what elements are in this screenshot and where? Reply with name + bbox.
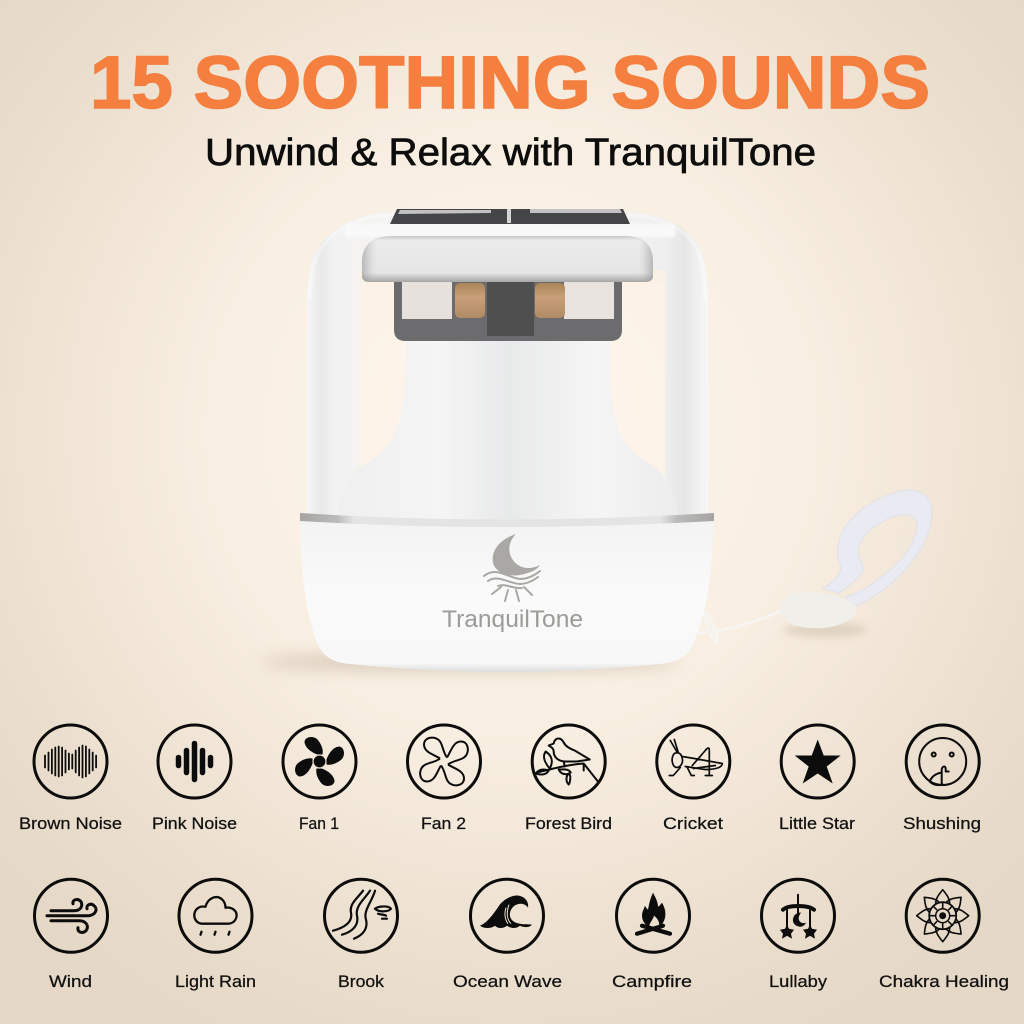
- icon: cloud with rain: [179, 879, 252, 952]
- label: Ocean Wave: [453, 972, 562, 991]
- sound: Fan 1: [283, 725, 356, 833]
- label: Campfire: [612, 972, 692, 991]
- sound: Forest Bird: [525, 725, 612, 833]
- label: Chakra Healing: [879, 972, 1009, 991]
- clear shell and handles: [307, 212, 708, 520]
- white base: [300, 521, 714, 672]
- top dark window: [390, 209, 630, 224]
- icon: solid fan: [283, 725, 356, 798]
- label: Pink Noise: [152, 814, 237, 833]
- neck and body: [338, 338, 678, 524]
- seam: [300, 513, 714, 528]
- sound: Brook: [324, 879, 398, 991]
- label: Wind: [49, 972, 92, 991]
- label: Cricket: [663, 814, 723, 833]
- label: Brown Noise: [19, 814, 122, 833]
- label: Fan 2: [421, 814, 466, 833]
- icon: cricket: [657, 725, 730, 798]
- icon: bird on branch: [532, 725, 605, 798]
- bead: [780, 592, 857, 628]
- sound: Chakra Healing: [879, 879, 1009, 991]
- sound grid: [19, 725, 1009, 991]
- floor shadow: [260, 653, 680, 671]
- product: TranquilTone speaker: [260, 209, 932, 672]
- label: Little Star: [779, 814, 855, 833]
- icon: wind: [34, 879, 108, 952]
- bead shadow: [783, 623, 867, 637]
- label: Light Rain: [175, 972, 256, 991]
- moon: [493, 534, 540, 576]
- label: Lullaby: [769, 972, 828, 991]
- sound: Lullaby: [762, 879, 834, 991]
- collar with drivers: [394, 270, 622, 341]
- icon: mandala: [906, 879, 979, 952]
- waves and rays: [484, 571, 540, 601]
- sound: Campfire: [612, 879, 692, 991]
- sound: Ocean Wave: [453, 879, 562, 991]
- grey lid ring: [362, 236, 653, 282]
- icon: bars: [158, 725, 231, 798]
- sound: Pink Noise: [152, 725, 237, 833]
- sound: Wind: [34, 879, 108, 991]
- subtitle: Unwind & Relax with TranquilTone: [205, 132, 816, 174]
- label: Fan 1: [299, 814, 339, 833]
- icon: campfire: [616, 879, 690, 952]
- label: Brook: [338, 972, 385, 991]
- cord: [697, 611, 782, 643]
- icon: outline fan: [408, 725, 480, 798]
- loop: [823, 490, 932, 607]
- icon: brook: [324, 879, 398, 952]
- icon: waveform: [34, 725, 107, 798]
- label: Shushing: [903, 814, 981, 833]
- sound: Cricket: [657, 725, 730, 833]
- icon: shushing face: [906, 725, 979, 798]
- sound: Light Rain: [175, 879, 256, 991]
- sound: Brown Noise: [19, 725, 122, 833]
- sound: Fan 2: [408, 725, 480, 833]
- icon: wave: [470, 879, 544, 952]
- sound: Little Star: [779, 725, 855, 833]
- lanyard: [697, 490, 932, 643]
- title: 15 SOOTHING SOUNDS: [90, 41, 930, 124]
- wordmark: TranquilTone: [442, 606, 583, 633]
- label: Forest Bird: [525, 814, 612, 833]
- sound: Shushing: [903, 725, 981, 833]
- icon: star: [781, 725, 854, 798]
- logo: [442, 534, 583, 633]
- icon: baby mobile: [762, 879, 834, 952]
